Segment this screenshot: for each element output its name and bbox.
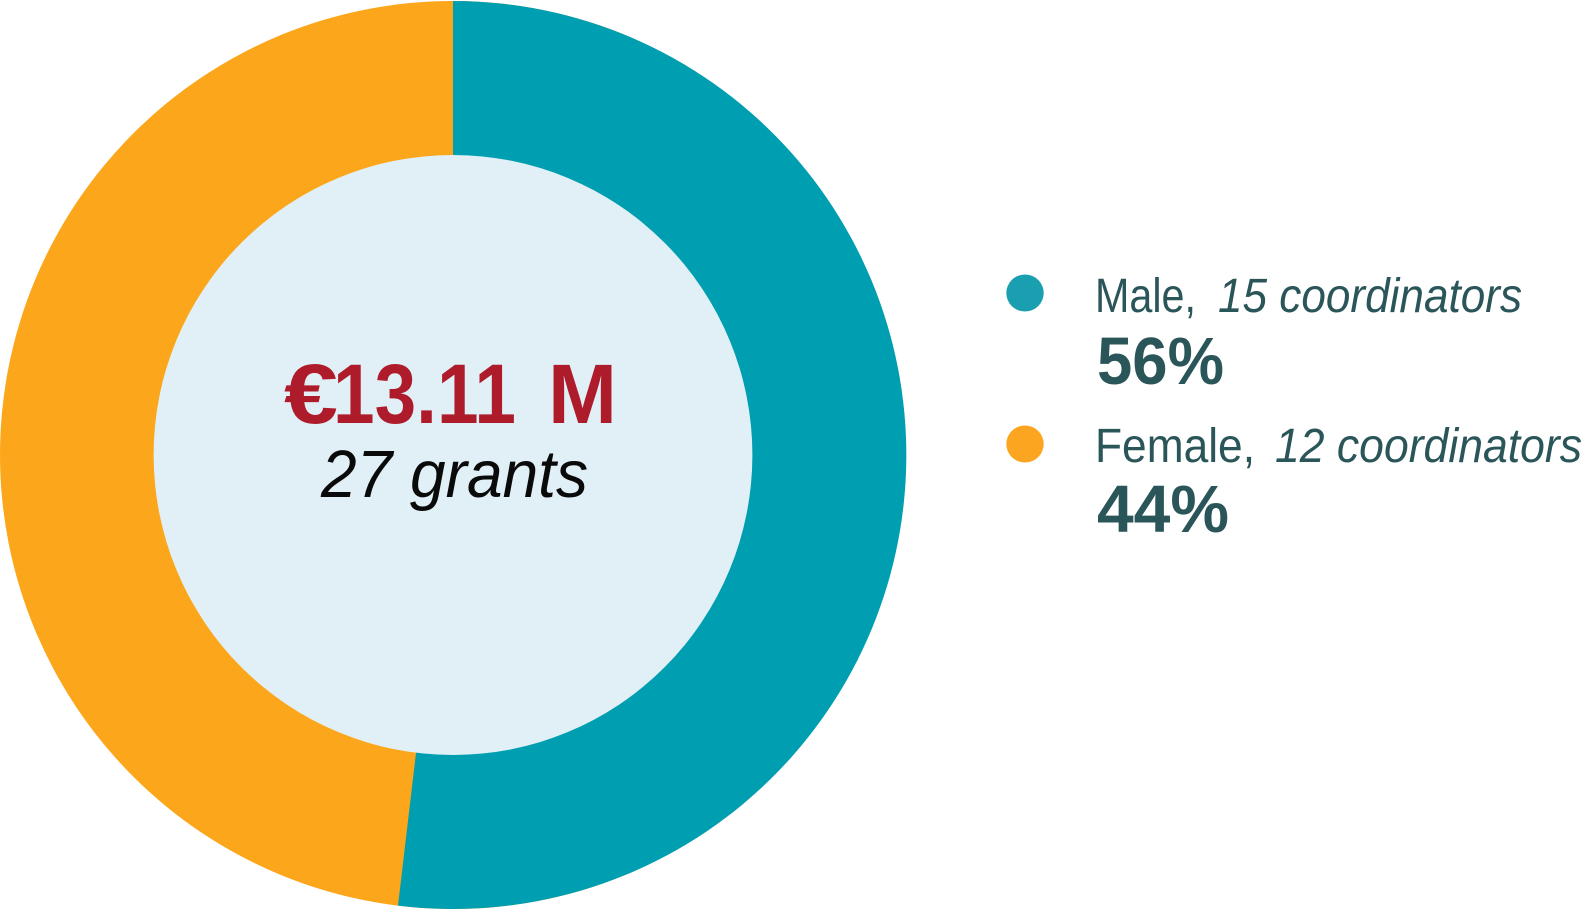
segment: female (orange) — [0, 1, 906, 909]
male percentage: 56% — [1097, 324, 1224, 399]
male coordinator count: 15 coordinators — [1218, 270, 1522, 323]
legend — [1006, 270, 1582, 547]
icon: orange dot — [1006, 426, 1044, 462]
male label: Male, — [1095, 270, 1196, 323]
female percentage: 44% — [1097, 472, 1229, 547]
centre disc — [154, 155, 752, 755]
female label: Female, — [1095, 420, 1255, 473]
icon: teal dot — [1006, 274, 1044, 312]
total amount: 13.11 — [333, 347, 516, 441]
legend item: female — [1006, 420, 1582, 547]
grant count: 27 grants — [320, 437, 588, 512]
legend item: male — [1006, 270, 1522, 399]
total amount: € — [284, 347, 338, 441]
donut chart — [0, 1, 906, 909]
total amount: M — [548, 347, 617, 441]
female coordinator count: 12 coordinators — [1275, 420, 1582, 473]
segment: male (teal) — [398, 1, 906, 909]
centre label — [284, 347, 617, 512]
